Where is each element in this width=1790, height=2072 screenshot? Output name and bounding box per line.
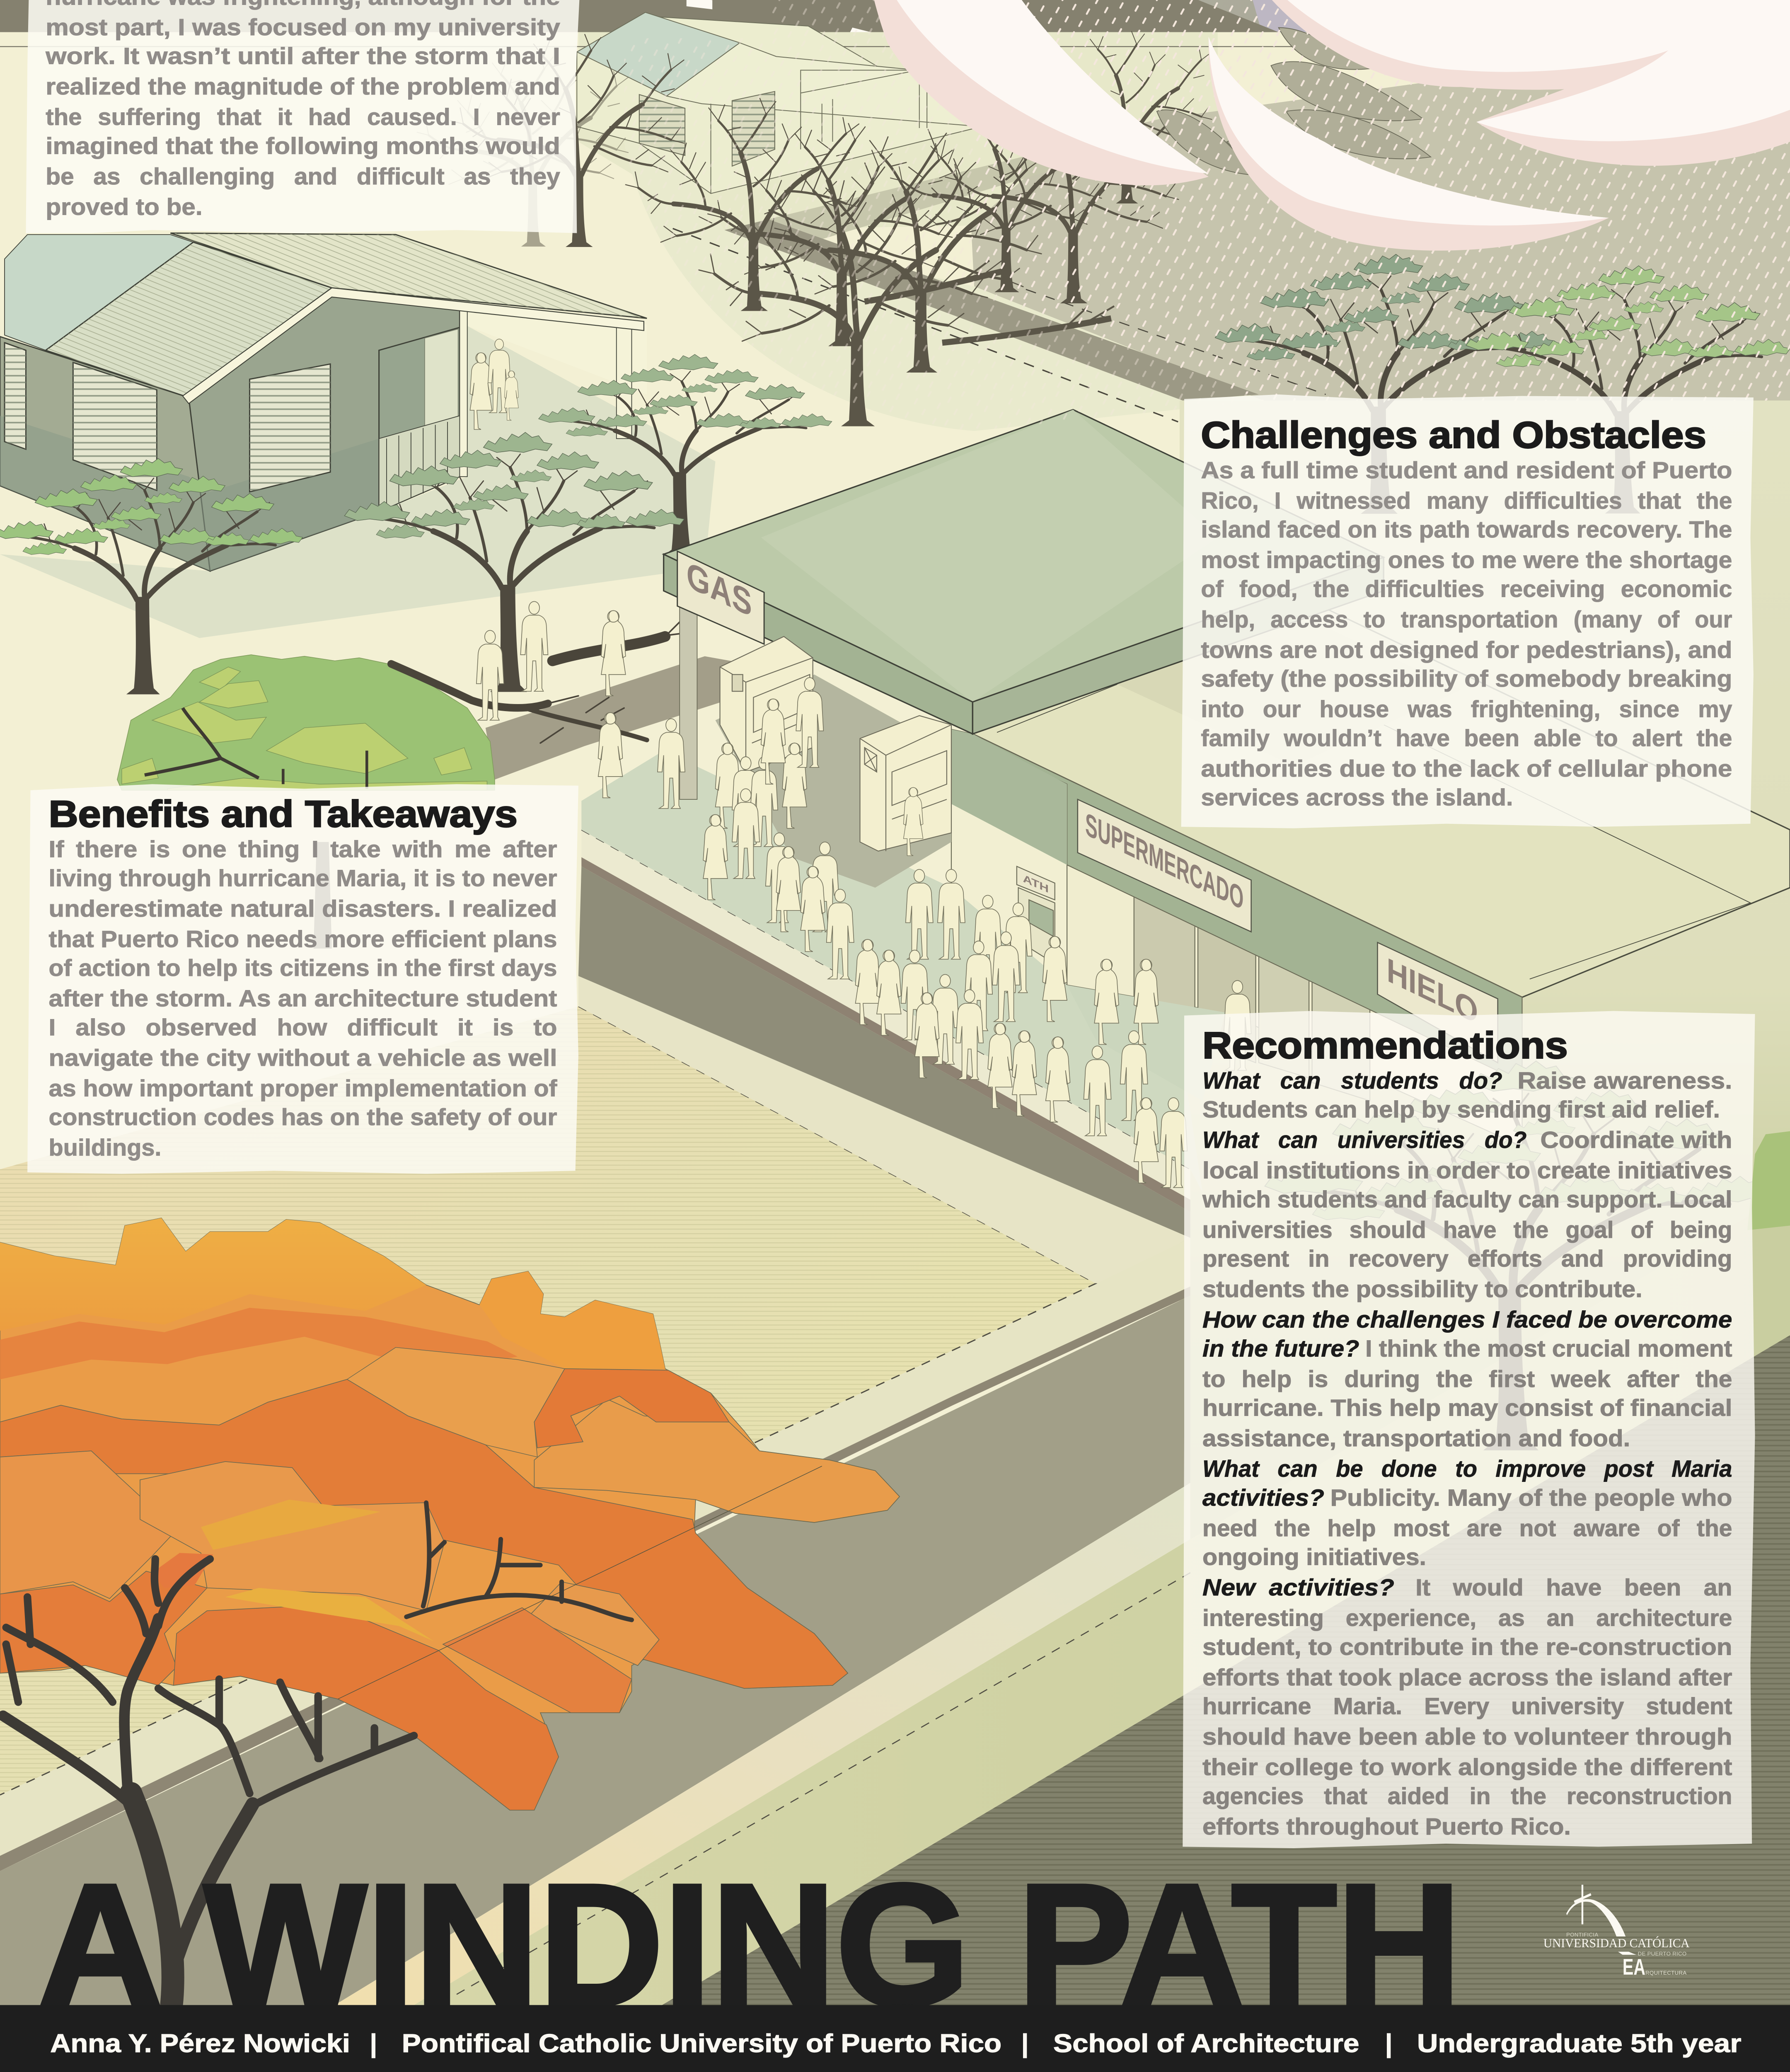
body text: Students can help by sending first aid relief. [1202,1097,1720,1123]
body text: authorities due to the lack of cellular phone [1201,755,1732,782]
faint tree behind benefits [314,842,332,949]
ATM [1017,867,1055,964]
body text: into our house was frightening, since my [1201,696,1732,723]
body text: in the future? [1202,1335,1359,1362]
body text: construction codes has on the safety of our [49,1104,557,1130]
body text: the suffering that it had caused. I never [46,104,560,131]
lawn [0,1007,1096,1795]
right edge foliage [1747,1131,1790,1230]
body text: help, access to transportation (many of our [1201,606,1732,633]
plaza [486,656,1225,1192]
logo: universidad catolica: PONTIFICIA [1566,1932,1598,1938]
heading: Recommendations [1202,1025,1568,1066]
footer bar: | [1385,2029,1392,2058]
body text: It would have been an [1415,1574,1732,1601]
body text: safety (the possibility of somebody breaking [1201,666,1732,692]
northwest road [578,830,1190,1283]
leafy foreground trees [0,354,832,695]
body text: Coordinate with [1541,1127,1732,1153]
crescent outer [861,0,1209,185]
crescent lower [1209,37,1609,251]
panel: challenges and obstacles [1181,395,1754,828]
body text: proved to be. [46,194,203,220]
supermarket sign: SUPERMERCADO [1085,806,1243,917]
right leafy trees [1215,254,1790,514]
olive corner [662,1335,1790,2072]
fallen trees [391,617,694,743]
green bush [117,655,495,790]
footer bar: Anna Y. Pérez Nowicki [50,2029,350,2058]
body text: agencies that aided in the reconstruction [1202,1783,1732,1809]
body text: What can students do? [1202,1067,1502,1094]
body text: assistance, transportation and food. [1202,1425,1630,1452]
body text: imagined that the following months would [46,133,560,159]
green zone [414,1192,1790,2005]
body text: most impacting ones to me were the shortage [1201,547,1732,574]
body text: efforts that took place across the island after [1202,1664,1732,1691]
body text: activities? [1202,1484,1324,1511]
footer bar: | [1021,2029,1028,2058]
footer bar: Pontifical Catholic University of Puerto Rico [402,2029,1001,2058]
body text: Publicity. Many of the people who [1330,1484,1732,1511]
body text: buildings. [49,1135,161,1161]
body text: which students and faculty can support. Local [1202,1186,1732,1213]
body text: What can be done to improve post Maria [1202,1456,1732,1482]
body text: I also observed how difficult it is to [49,1014,557,1041]
orange tree trunk [3,1503,631,2014]
body text: realized the magnitude of the problem and [46,73,560,100]
windblown palm fronds [1157,28,1431,178]
body text: services across the island. [1201,784,1513,811]
snow overlay [624,0,1790,431]
body text: I think the most crucial moment [1365,1335,1732,1362]
body text: What can universities do? [1202,1127,1526,1153]
gas canopy [664,410,1384,734]
body text: island faced on its path towards recovery. The [1201,516,1732,543]
body text [49,836,558,1161]
body text [1202,1067,1732,1840]
body text: If there is one thing I take with me after [49,836,557,863]
body text: that Puerto Rico needs more efficient plans [49,926,557,952]
hurricane [861,0,1790,251]
body text: As a full time student and resident of Puerto [1201,457,1732,484]
body text: after the storm. As an architecture student [49,985,557,1012]
footer bar: Undergraduate 5th year [1417,2029,1741,2058]
logo: universidad catolica: UNIVERSIDAD CATÓLICA [1543,1936,1690,1950]
footer bar [0,2005,1790,2072]
body text: need the help most are not aware of the [1202,1515,1732,1542]
body text: How can the challenges I faced be overcome [1202,1307,1732,1333]
trees: background bare row [417,31,1212,426]
main storm body [1205,0,1790,166]
supermarket roof [972,550,1790,997]
sky [0,0,1790,38]
heading: Benefits and Takeaways [49,794,518,835]
panel: recommendations [1183,1011,1755,1848]
body text: to help is during the first week after the [1202,1366,1732,1392]
body text: New activities? [1202,1574,1394,1601]
mountains [0,0,1263,38]
body text: living through hurricane Maria, it is to never [49,865,557,891]
logo: universidad catolica: EA [1623,1954,1645,1980]
green house [0,233,716,638]
body text: hurricane. This help may consist of financial [1202,1395,1732,1421]
body text: hurricane Maria. Every university student [1202,1693,1732,1720]
body text: interesting experience, as an architecture [1202,1605,1732,1631]
southwest road [0,1238,1190,2005]
body text [1201,457,1732,811]
panel: experience of the storm [26,0,580,233]
gas sign [677,551,764,799]
back house [577,12,980,194]
ATM: ATH [1023,872,1049,896]
orange flamboyant tree [0,1218,900,1810]
footer bar: | [370,2029,377,2058]
body text: most part, I was focused on my university [46,14,560,41]
body text: of action to help its citizens in the first days [49,955,557,981]
logo: universidad catolica [1543,1885,1690,1980]
body text: Rico, I witnessed many difficulties that the [1201,487,1732,514]
logo: universidad catolica: DE PUERTO RICO [1638,1951,1686,1957]
body text: ongoing initiatives. [1202,1544,1426,1571]
body text: efforts throughout Puerto Rico. [1202,1813,1571,1840]
body text: be as challenging and difficult as they [46,163,560,190]
heading: Challenges and Obstacles [1201,414,1706,456]
body text: navigate the city without a vehicle as well [49,1045,557,1071]
body text: towns are not designed for pedestrians), and [1201,637,1732,663]
body text: universities should have the goal of being [1202,1217,1732,1243]
panel: benefits and takeaways [27,784,578,1174]
body text: local institutions in order to create initiatives [1202,1157,1732,1184]
body text: of food, the difficulties receiving economic [1201,576,1732,602]
body text: underestimate natural disasters. I realized [49,896,557,922]
hielo sign [1377,942,1498,1063]
body text: as how important proper implementation of [49,1075,558,1101]
gas pumps [720,637,951,851]
body text: students the possibility to contribute. [1202,1276,1642,1302]
hedge [0,0,1309,44]
body text: family wouldn’t have been able to alert the [1201,725,1732,751]
body text: present in recovery efforts and providing [1202,1246,1732,1272]
body text [45,0,560,220]
body text: work. It wasn’t until after the storm that I [45,43,560,70]
body text: should have been able to volunteer through [1202,1723,1732,1750]
hielo sign: HIELO [1387,951,1478,1031]
queue of people [477,601,1251,1188]
debris [636,0,1260,44]
large tree behind recommendations [1265,1061,1774,1450]
title: A WINDING PATH [38,1848,1461,2042]
logo: universidad catolica: RQUITECTURA [1645,1970,1686,1976]
supermarket facade [951,729,1522,1147]
supermarket sign [1078,799,1251,932]
body text: their college to work alongside the different [1202,1754,1732,1781]
body text: student, to contribute in the re-construction [1202,1634,1732,1660]
gas sign: GAS [687,553,752,625]
footer bar: School of Architecture [1053,2029,1359,2058]
body text: Raise awareness. [1517,1067,1732,1094]
